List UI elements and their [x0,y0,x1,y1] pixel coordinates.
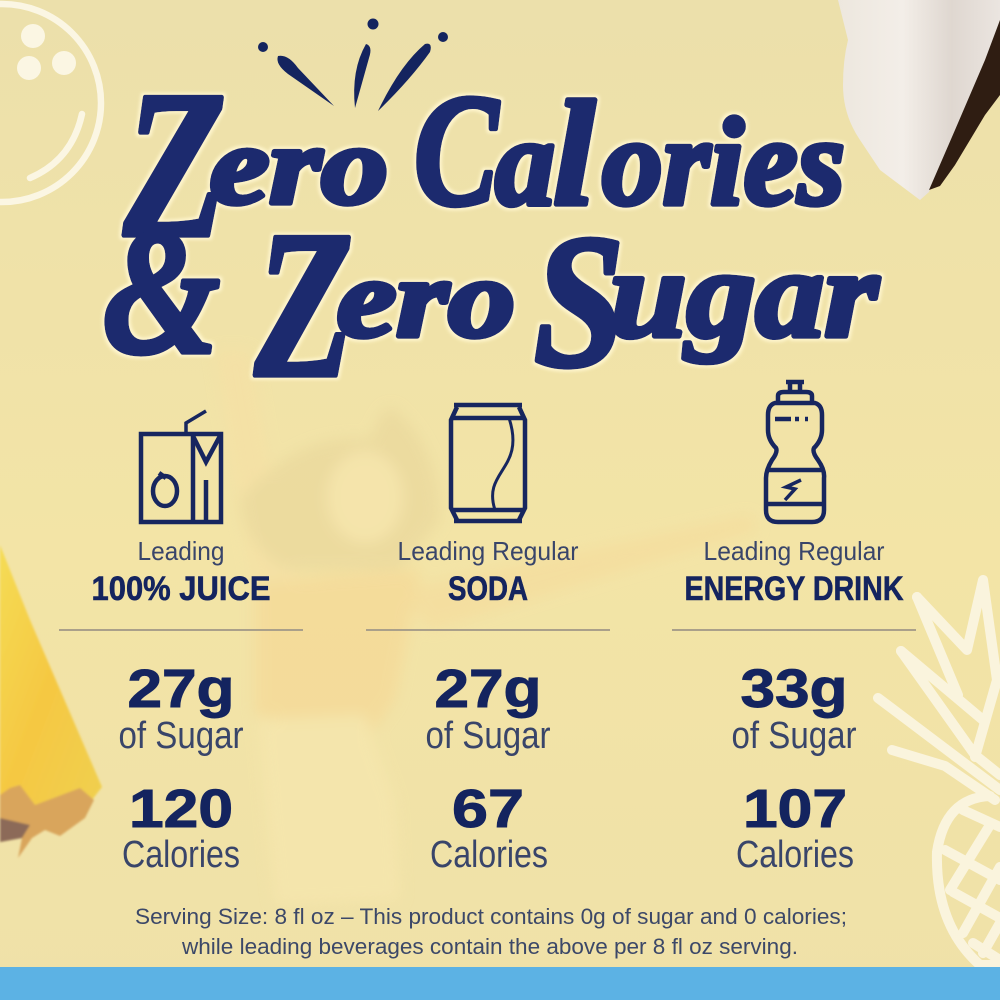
soda calories: Calories [430,834,548,876]
pineapple wedge photo [0,545,102,858]
juice calories: Calories [122,834,240,876]
footnote: Serving Size: 8 fl oz – This product contains 0g of sugar and 0 calories; [135,904,847,929]
burst sparks [258,18,448,111]
energy calories: Calories [736,834,854,876]
juice calories [122,779,240,876]
title: S [534,197,624,407]
energy label [684,536,904,608]
column: juice [59,536,303,876]
icon: sports bottle [766,382,824,522]
juice label [92,536,270,608]
energy calories: 107 [743,779,847,839]
energy label: ENERGY DRINK [684,570,904,608]
footnote [135,904,847,959]
energy sugar: of Sugar [732,715,857,757]
title: l [553,71,595,237]
soda sugar: of Sugar [426,715,551,757]
juice sugar: 27g [128,659,234,719]
soda calories: 67 [452,779,524,839]
column: energy drink [672,536,916,876]
coconut outline icon [0,4,101,202]
icon: juice box [141,411,221,522]
title: Z [123,49,226,281]
title: a [495,94,555,232]
soda sugar [426,659,551,757]
blue footer band [0,967,1000,1000]
soda label: SODA [448,570,528,608]
soda label [398,536,579,608]
juice sugar [118,659,244,757]
energy label: Leading Regular [704,536,885,566]
juice label: Leading [138,536,224,566]
coconut chunk photo [838,0,1000,200]
juice label: 100% JUICE [92,570,270,608]
title: ugar [610,226,879,364]
title [103,49,879,421]
energy sugar: 33g [740,659,848,719]
soda sugar: 27g [434,659,542,719]
juice calories: 120 [129,779,233,839]
pineapple outline icon [878,580,1000,965]
soda calories [430,779,548,876]
title: ories [602,94,845,232]
title: & [103,192,220,391]
energy calories [736,779,854,876]
soda label: Leading Regular [398,536,579,566]
juice sugar: of Sugar [118,715,244,757]
title: ero [210,104,388,228]
footnote: while leading beverages contain the above per 8 fl oz serving. [181,934,798,959]
title: ero [337,237,515,361]
column: soda [366,536,610,876]
title: C [414,61,500,239]
energy sugar [732,659,857,757]
icon: soda can [451,405,525,521]
ghosted photo of woman [215,350,758,905]
title: Z [254,189,353,421]
